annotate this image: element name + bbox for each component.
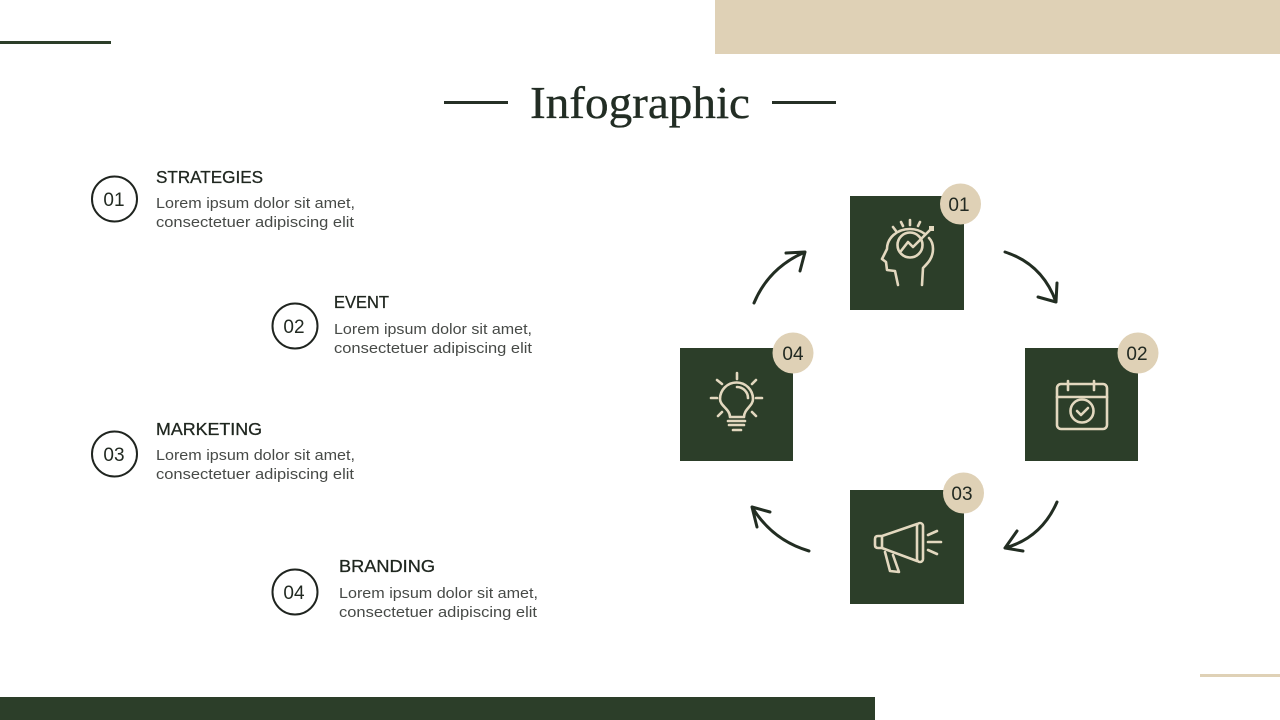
arrow: 03 to 04 [752, 507, 809, 551]
cycle node 03: megaphone icon: 03 [951, 484, 973, 505]
cycle node 04: light bulb icon [680, 332, 814, 461]
list item 03: marketing [92, 419, 355, 483]
list item 04: branding: BRANDING [339, 556, 435, 576]
list item 02: event: Lorem ipsum dolor sit amet, [334, 322, 532, 338]
cycle node 02: calendar icon [1025, 332, 1158, 461]
list item 04: branding: consectetuer adipiscing elit [339, 605, 537, 621]
list item 03: marketing: 03 [103, 445, 125, 466]
list item 01: strategies: consectetuer adipiscing elit [156, 215, 354, 231]
list item 03: marketing: Lorem ipsum dolor sit amet, [156, 448, 355, 464]
list item 01: strategies: Lorem ipsum dolor sit amet, [156, 196, 355, 212]
list item 03: marketing: MARKETING [156, 419, 262, 439]
cycle node 01: head icon: 01 [948, 195, 970, 216]
list item 01: strategies: STRATEGIES [156, 167, 263, 187]
list item 02: event: 02 [283, 317, 305, 338]
top left rule [0, 41, 111, 44]
bottom right tan rule [1200, 674, 1280, 677]
arrow: 01 to 02 [1005, 252, 1057, 302]
list item 03: marketing: consectetuer adipiscing elit [156, 467, 354, 483]
arrow: 02 to 03 [1005, 502, 1057, 551]
list item 02: event: EVENT [334, 292, 389, 312]
cycle node 02: calendar icon: 02 [1126, 344, 1148, 365]
cycle node 03: megaphone icon [850, 472, 984, 604]
arrow: 04 to 01 [754, 252, 805, 303]
top tan band [715, 0, 1280, 54]
list item 04: branding: 04 [283, 583, 305, 604]
cycle node 04: light bulb icon: 04 [782, 344, 804, 365]
cycle node 01: head icon [850, 184, 981, 310]
title: Infographic [530, 77, 750, 128]
title [444, 77, 836, 128]
bottom green bar [0, 697, 875, 720]
list item 01: strategies [92, 167, 355, 231]
list item 04: branding: Lorem ipsum dolor sit amet, [339, 586, 538, 602]
list item 02: event [272, 292, 532, 357]
list item 01: strategies: 01 [103, 190, 125, 211]
list item 04: branding [272, 556, 538, 621]
list item 02: event: consectetuer adipiscing elit [334, 341, 532, 357]
